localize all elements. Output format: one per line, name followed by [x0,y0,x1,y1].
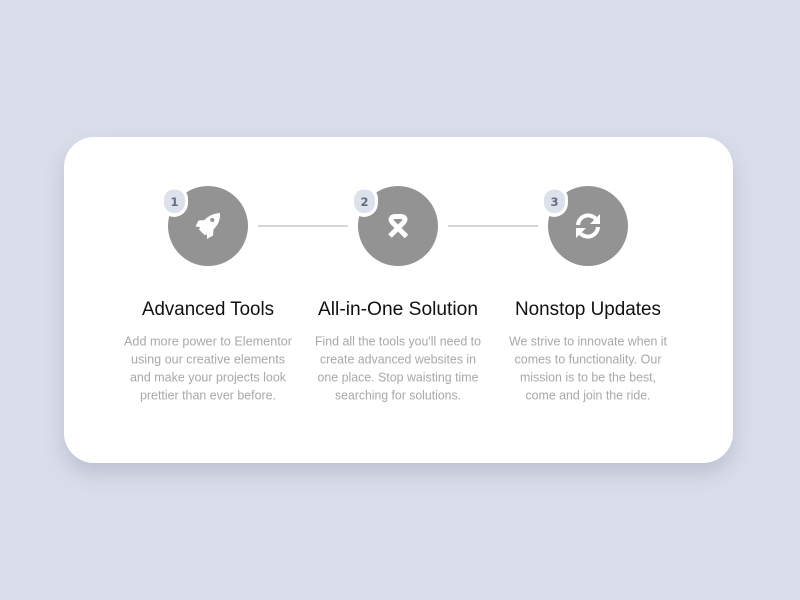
badge 1: 1 [170,195,179,209]
icon circle 2 [358,186,438,266]
icon: ribbon [390,216,406,236]
badge 2: 2 [360,195,369,209]
description 1 [124,334,293,402]
connector: step 2 to 3 [448,225,538,227]
description 3: mission is to be the best, [520,370,656,384]
connector: step 1 to 2 [258,225,348,227]
description 3: comes to functionality. Our [514,352,662,366]
description 2: Find all the tools you'll need to [315,334,481,348]
heading 3: Nonstop Updates [515,299,661,320]
badge 3 [540,185,568,217]
badge 2 [350,185,378,217]
icon circle 3 [548,186,628,266]
description 3: come and join the ride. [526,388,650,402]
description 1: using our creative elements [131,352,285,366]
icon: refresh [576,214,600,238]
description 1: and make your projects look [130,370,286,384]
step 3 [509,185,667,402]
heading 1: Advanced Tools [142,299,274,320]
step 2 [315,185,481,402]
description 2 [315,334,481,402]
icon: rocket [196,213,220,239]
step 1 [124,185,293,402]
description 3 [509,334,667,402]
description 2: create advanced websites in [320,352,476,366]
heading 2: All-in-One Solution [318,299,478,320]
description 2: searching for solutions. [335,388,461,402]
icon circle 1 [168,186,248,266]
badge 3: 3 [550,195,559,209]
description 3: We strive to innovate when it [509,334,667,348]
panel: card [64,137,733,463]
badge 1 [160,185,188,217]
description 1: Add more power to Elementor [124,334,293,348]
description 2: one place. Stop waisting time [318,370,478,384]
description 1: prettier than ever before. [140,388,276,402]
